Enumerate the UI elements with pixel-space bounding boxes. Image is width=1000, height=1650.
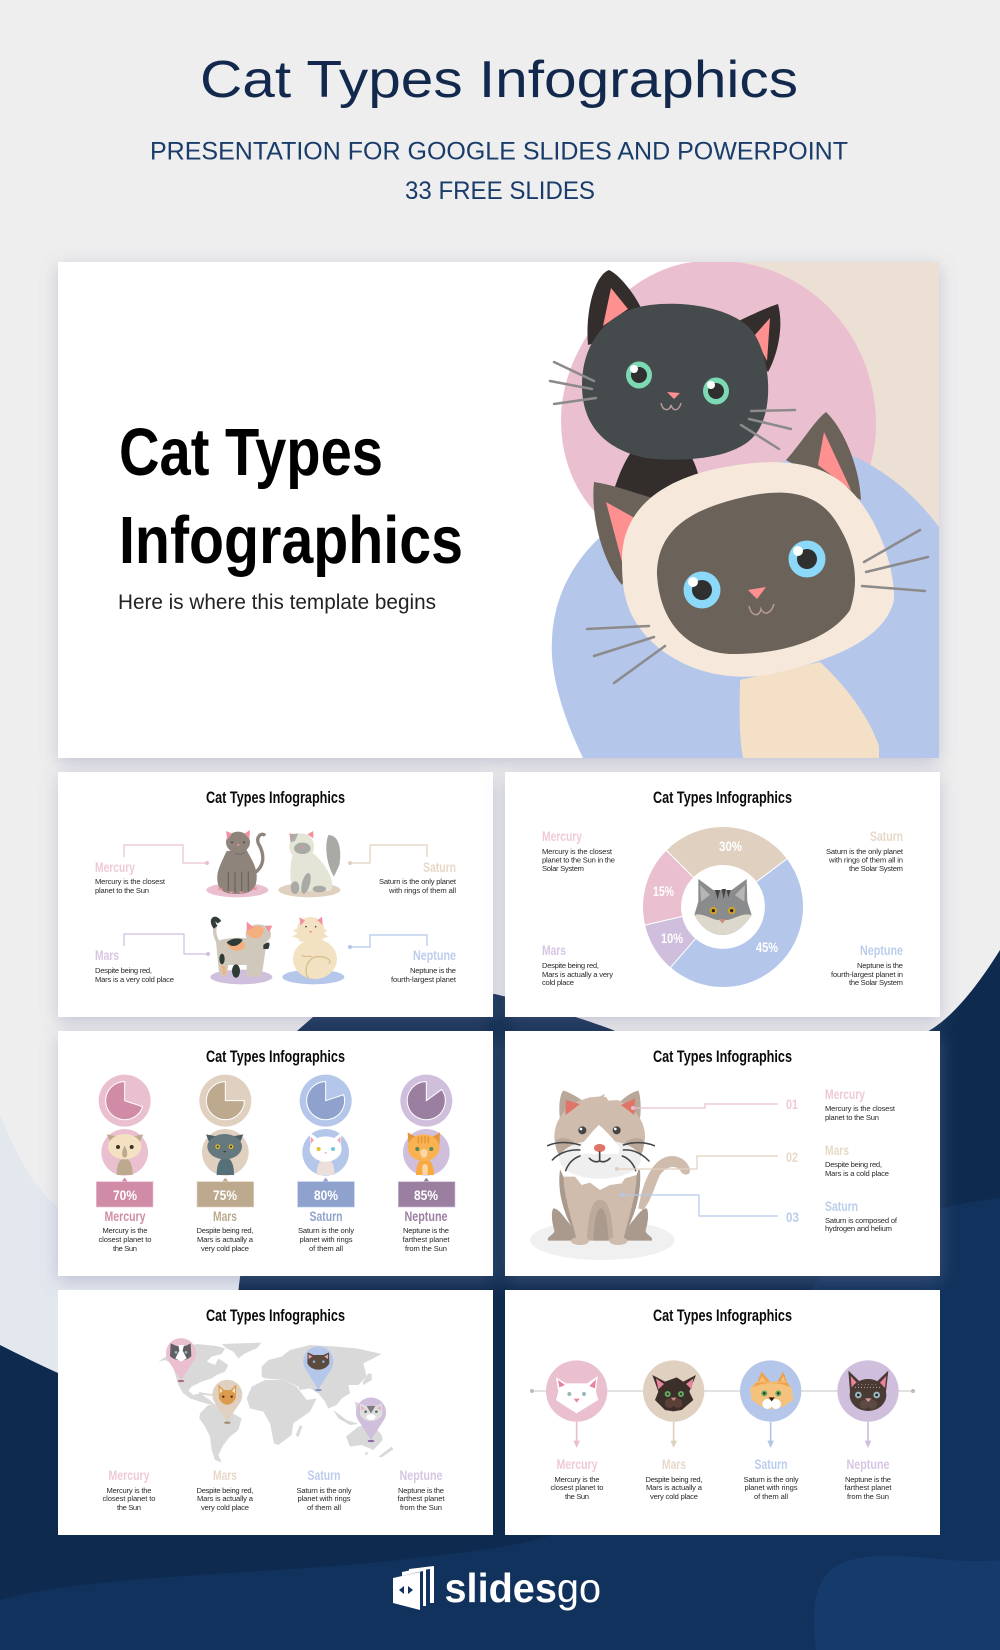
label: Neptune: farthest planet <box>398 1494 445 1503</box>
label: Mars: Despite being red, <box>825 1160 882 1169</box>
label: Saturn: Saturn is the only <box>744 1475 799 1484</box>
label: Mars <box>542 943 613 987</box>
column labels: Mars <box>213 1209 237 1224</box>
label: Saturn <box>826 829 904 873</box>
slide title: Cat Types Infographics <box>206 1307 345 1325</box>
percentages: 15% <box>653 883 674 899</box>
label: Mars: Mars is actually a <box>646 1483 703 1492</box>
label: Mercury: Mercury is the closest <box>825 1104 896 1113</box>
label: Neptune <box>844 1457 892 1501</box>
label: Saturn: of them all <box>307 1503 341 1512</box>
label: Mercury: Mercury <box>825 1087 865 1102</box>
label: Mercury <box>95 860 166 895</box>
label: Mercury: Mercury is the <box>106 1486 152 1495</box>
timeline line <box>530 1389 915 1393</box>
logo text: slidesgo <box>444 1565 601 1611</box>
label: Saturn: Saturn <box>423 860 456 875</box>
label: Mars: Mars is a very cold place <box>95 975 174 984</box>
map pins <box>166 1338 386 1442</box>
column labels <box>98 1209 450 1253</box>
slide title: Cat Types Infographics <box>206 1048 345 1066</box>
column 75% <box>197 1075 254 1207</box>
label: Mars: Mars <box>542 943 566 958</box>
label: Saturn: Saturn <box>825 1199 858 1214</box>
label: Mercury: planet to the Sun <box>95 886 149 895</box>
column 70% <box>96 1075 153 1207</box>
label: Mercury <box>102 1468 156 1512</box>
column labels: Neptune is the <box>403 1226 449 1235</box>
label: Neptune: fourth-largest planet in <box>831 970 903 979</box>
label: Neptune: fourth-largest planet <box>391 975 457 984</box>
world map <box>158 1343 393 1463</box>
connector lines <box>615 1104 778 1216</box>
label: Neptune: Neptune <box>846 1457 890 1472</box>
percent values: 75% <box>213 1187 237 1203</box>
label: Mercury: planet to the Sun <box>825 1113 879 1122</box>
column 85% <box>398 1075 455 1207</box>
label: Mars <box>196 1468 254 1512</box>
title: Cat Types Infographics <box>200 51 798 109</box>
label: Neptune: farthest planet <box>844 1483 892 1492</box>
cover heading <box>119 415 463 578</box>
label: Mercury <box>550 1457 604 1501</box>
column labels: Mars is actually a <box>197 1235 254 1244</box>
column labels: Saturn <box>310 1209 342 1224</box>
label: Mercury: Mercury is the closest <box>95 877 166 886</box>
label: Mars: Mars is actually a very <box>542 970 613 979</box>
label: Mercury: the Sun <box>117 1503 141 1512</box>
label: Saturn <box>379 860 457 895</box>
numbers: 03 <box>786 1210 799 1225</box>
column labels: Despite being red, <box>196 1226 254 1235</box>
cover heading: Infographics <box>119 503 463 578</box>
connector lines <box>124 845 427 956</box>
cat: grey <box>206 830 268 897</box>
label: Mars: Mars is a cold place <box>825 1169 889 1178</box>
label: Mercury: closest planet to <box>102 1494 156 1503</box>
column labels: Neptune <box>404 1209 448 1224</box>
column labels: Saturn is the only <box>298 1226 354 1235</box>
label: Saturn: with rings of them all <box>388 886 456 895</box>
column labels: the Sun <box>113 1244 137 1253</box>
label: Neptune <box>391 948 457 984</box>
percent values: 70% <box>113 1187 137 1203</box>
column labels: of them all <box>309 1244 343 1253</box>
panel: cover slide <box>58 262 939 758</box>
label: Saturn: Saturn is the only planet <box>379 877 457 886</box>
label: Saturn: the Solar System <box>849 864 903 873</box>
label: Saturn: Saturn is composed of <box>825 1216 898 1225</box>
label: Saturn: planet with rings <box>298 1494 351 1503</box>
label: Mars <box>825 1143 889 1178</box>
label: Saturn <box>296 1468 352 1512</box>
label: Saturn: Saturn <box>754 1457 788 1472</box>
numbers: 01 <box>786 1097 798 1112</box>
pin: Mercury <box>166 1338 196 1382</box>
slide title: Cat Types Infographics <box>206 789 345 807</box>
subtitle <box>150 138 848 205</box>
label: Saturn: Saturn <box>308 1468 340 1483</box>
slide title: Cat Types Infographics <box>653 1048 792 1066</box>
label: Mars: Mars is actually a <box>197 1494 254 1503</box>
cover subheading: Here is where this template begins <box>118 591 436 614</box>
cat: calico <box>210 919 272 984</box>
label: Mercury: Mercury <box>556 1457 598 1472</box>
label: Neptune <box>831 943 903 987</box>
percentages: 30% <box>719 838 742 854</box>
label: Neptune <box>398 1468 445 1512</box>
column labels: Mercury is the <box>102 1226 148 1235</box>
percentages: 45% <box>756 939 778 955</box>
subtitle: PRESENTATION FOR GOOGLE SLIDES AND POWERPOINT <box>150 138 848 166</box>
percentages <box>653 838 778 955</box>
label: Neptune: the Solar System <box>849 978 903 987</box>
cover illustration: two cats <box>550 262 939 758</box>
label: Saturn: planet with rings <box>744 1483 798 1492</box>
panel: slide timeline <box>505 1290 940 1535</box>
donut chart <box>643 827 804 988</box>
cat: cream with grey face <box>278 831 340 897</box>
label: Mars: Mars <box>95 948 119 963</box>
label: Mars: Mars <box>213 1468 237 1483</box>
label: Mars: Mars <box>662 1457 686 1472</box>
subtitle: 33 FREE SLIDES <box>405 177 595 205</box>
column labels: from the Sun <box>405 1244 447 1253</box>
label: Mars <box>646 1457 703 1501</box>
percent values <box>113 1187 438 1203</box>
slide title: Cat Types Infographics <box>653 1307 792 1325</box>
label: Mercury: closest planet to <box>550 1483 604 1492</box>
siamese cat <box>587 412 928 758</box>
label: Mars: Despite being red, <box>196 1486 254 1495</box>
percent values: 80% <box>314 1187 338 1203</box>
label: Neptune: Neptune is the <box>398 1486 444 1495</box>
label: Mercury: Mercury <box>95 860 135 875</box>
column labels: very cold place <box>201 1244 249 1253</box>
label: Neptune: from the Sun <box>400 1503 442 1512</box>
icon: tabby cat head <box>694 879 752 935</box>
label: Mercury: Mercury is the closest <box>542 847 613 856</box>
label: Mercury: Mercury <box>542 829 582 844</box>
column 80% <box>298 1075 354 1207</box>
label: Mars: very cold place <box>201 1503 249 1512</box>
column labels: closest planet to <box>98 1235 152 1244</box>
label: Saturn <box>825 1199 898 1233</box>
cat: fluffy cream <box>282 917 344 984</box>
label: Mars: Despite being red, <box>542 961 599 970</box>
pin: Mars <box>212 1380 242 1424</box>
label: Mars: very cold place <box>650 1492 698 1501</box>
cat illustrations <box>206 830 344 984</box>
label: Mars: Despite being red, <box>646 1475 702 1484</box>
black cat <box>550 270 795 520</box>
label: Saturn: of them all <box>754 1492 788 1501</box>
pie icons and cat portraits <box>96 1075 455 1207</box>
label: Mars: Despite being red, <box>95 966 152 975</box>
label: Saturn: hydrogen and helium <box>825 1224 892 1233</box>
label: Mercury: Solar System <box>542 864 584 873</box>
label: Neptune: Neptune is the <box>410 966 456 975</box>
label: Saturn: with rings of them all in <box>828 856 903 864</box>
panel: slide donut chart <box>505 772 940 1017</box>
label: Neptune: Neptune <box>400 1468 443 1483</box>
big cat illustration <box>530 1091 690 1260</box>
label: Neptune: Neptune <box>860 943 903 958</box>
label: Mercury <box>825 1087 896 1122</box>
column labels: planet with rings <box>300 1235 353 1244</box>
node: orange cat <box>740 1360 801 1448</box>
cat circles with arrows <box>546 1360 899 1448</box>
pin: Neptune <box>356 1397 386 1442</box>
label: Saturn: Saturn is the only <box>296 1486 352 1495</box>
logo: slidesgo <box>393 1565 601 1611</box>
panel: slide sitting cats <box>58 772 493 1017</box>
percent values: 85% <box>414 1187 438 1203</box>
label: Neptune: Neptune is the <box>857 961 903 970</box>
label: Saturn <box>744 1457 799 1501</box>
label: Saturn: Saturn <box>870 829 903 844</box>
label: Mercury: the Sun <box>565 1492 589 1501</box>
label: Mercury: Mercury is the <box>554 1475 600 1484</box>
pin: Saturn <box>303 1346 333 1391</box>
cover heading: Cat Types <box>119 415 383 490</box>
column labels: farthest planet <box>402 1235 450 1244</box>
slide title: Cat Types Infographics <box>653 789 792 807</box>
label: Neptune: from the Sun <box>847 1492 889 1501</box>
node: white cat <box>546 1360 607 1448</box>
icon: stacked slides <box>393 1566 434 1610</box>
percentages: 10% <box>661 930 683 946</box>
label: Neptune: Neptune is the <box>845 1475 891 1484</box>
numbers: 02 <box>786 1150 798 1165</box>
label: Mercury: planet to the Sun in the <box>542 856 615 864</box>
label: Mercury: Mercury <box>108 1468 150 1483</box>
node: dark cat <box>643 1360 704 1448</box>
column labels: Mercury <box>104 1209 146 1224</box>
panel: slide world map <box>58 1290 493 1535</box>
panel: slide big cat <box>505 1031 940 1276</box>
node: spotted cat <box>837 1360 899 1448</box>
label: Mars <box>95 948 174 984</box>
label: Saturn: Saturn is the only planet <box>826 847 904 856</box>
label: Mercury <box>542 829 615 873</box>
panel: slide percentages <box>58 1031 493 1276</box>
label: Mars: cold place <box>542 978 574 987</box>
label: Mars: Mars <box>825 1143 849 1158</box>
label: Neptune: Neptune <box>413 948 456 963</box>
numbers <box>786 1097 799 1225</box>
